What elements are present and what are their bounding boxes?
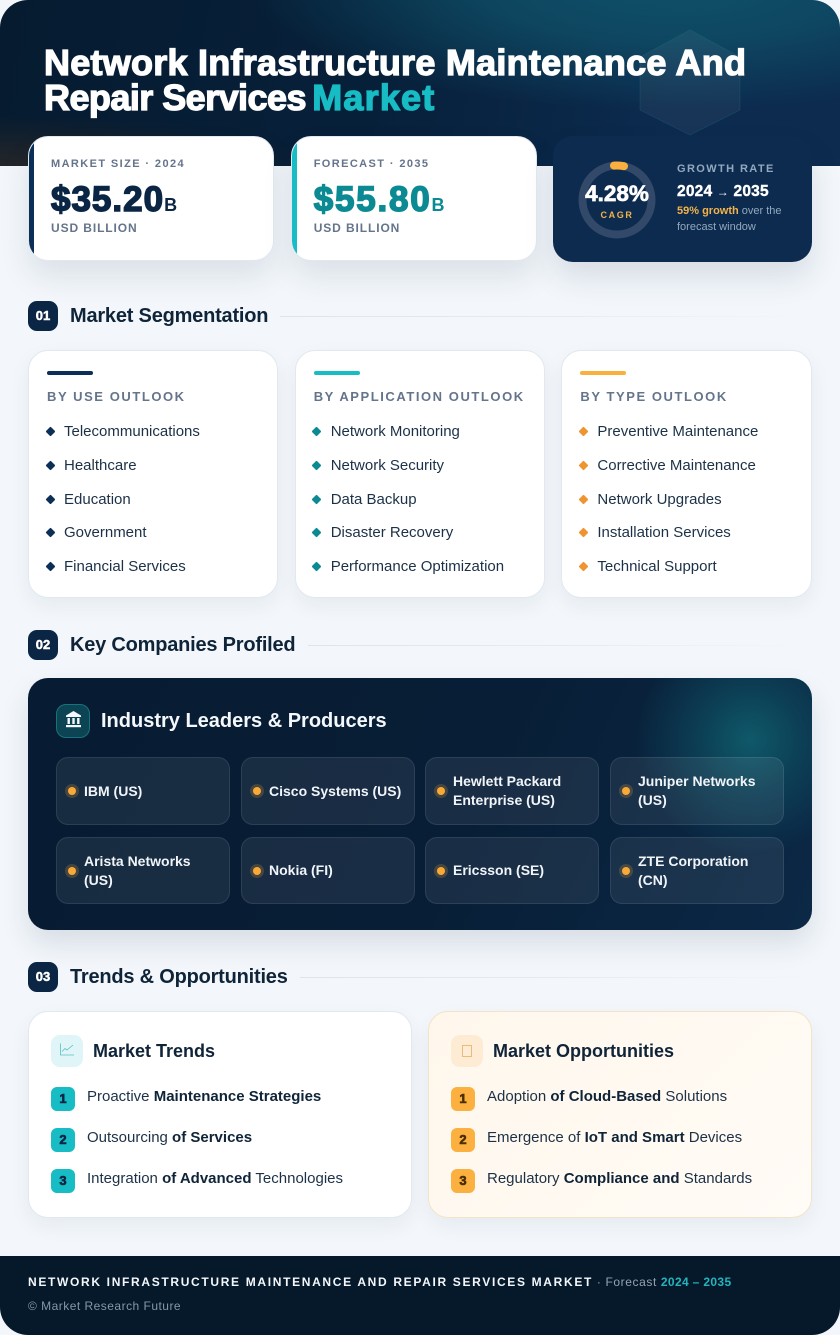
panel: market trends: 3 [59, 1173, 67, 1188]
panel: market opportunities [428, 1011, 812, 1218]
panel: market opportunities: 2 [459, 1132, 467, 1147]
panel: industry leaders: Cisco Systems (US) [269, 782, 401, 798]
icon: bank [56, 704, 90, 738]
stat card: forecast: $55.80B [314, 180, 445, 219]
panel: industry leaders: Arista Networks [84, 852, 191, 868]
heading: key companies: Key Companies Profiled [70, 634, 295, 656]
stat card: market size: USD BILLION [51, 221, 138, 235]
footer copyright: © Market Research Future [28, 1299, 181, 1313]
footer [0, 1256, 840, 1335]
panel: by type outlook: Technical Support [597, 558, 717, 575]
panel: industry leaders: Juniper Networks [638, 773, 755, 789]
panel: industry leaders [28, 678, 812, 930]
panel: market opportunities: Adoption of Cloud-Based Solutions [487, 1088, 727, 1105]
panel: by application outlook: BY APPLICATION OUTLOOK [314, 389, 525, 404]
stat card: market size [28, 136, 274, 261]
panel: market trends: 1 [59, 1091, 67, 1106]
panel: by type outlook: BY TYPE OUTLOOK [580, 389, 728, 404]
panel: by use outlook: Healthcare [64, 457, 137, 474]
title: Network Infrastructure Maintenance And [44, 42, 746, 82]
panel: by use outlook: Telecommunications [64, 423, 200, 440]
stat card: CAGR growth rate: 2024 → 2035 [677, 183, 769, 200]
panel: market trends: Proactive Maintenance Strategies [87, 1088, 321, 1105]
section number 03 [28, 962, 58, 992]
panel: by use outlook: Financial Services [64, 558, 186, 575]
CAGR ring [578, 162, 656, 238]
panel: industry leaders: ZTE Corporation [638, 852, 748, 868]
panel: industry leaders: (CN) [638, 872, 668, 888]
section number 02: 02 [36, 637, 50, 652]
panel: by use outlook: Education [64, 491, 131, 508]
CAGR value: 4.28% [585, 181, 649, 206]
stat card: CAGR growth rate [553, 136, 812, 262]
panel: market trends: Outsourcing of Services [87, 1129, 252, 1146]
panel: market trends: 2 [59, 1132, 67, 1147]
panel: by application outlook: Performance Optimization [331, 558, 504, 575]
growth text: GROWTH RATE [677, 163, 775, 175]
panel: market opportunities: Market Opportunities [493, 1041, 674, 1061]
panel: by application outlook: Data Backup [331, 491, 417, 508]
panel: by type outlook: Preventive Maintenance [597, 423, 758, 440]
panel: by type outlook: Corrective Maintenance [597, 457, 756, 474]
icon: placeholder glyph [451, 1035, 483, 1067]
icon: line chart [51, 1035, 83, 1067]
stat card: forecast: USD BILLION [314, 221, 400, 235]
panel: industry leaders: (US) [638, 792, 667, 808]
panel: market opportunities: 3 [459, 1173, 467, 1188]
panel: by application outlook [295, 350, 545, 598]
panel: market opportunities: 1 [459, 1091, 467, 1106]
panel: market opportunities: Emergence of IoT and Smart Devices [487, 1129, 742, 1146]
company chips: IBM (US) [84, 782, 142, 798]
footer title: NETWORK INFRASTRUCTURE MAINTENANCE AND REPAIR SERVICES MARKET · Forecast 2024 – 2035 [28, 1275, 731, 1289]
stat card: market size: $35.20B [51, 180, 177, 219]
stat card: forecast: FORECAST · 2035 [314, 158, 429, 170]
panel: by type outlook: Installation Services [597, 524, 731, 541]
panel: industry leaders: Nokia (FI) [269, 862, 333, 878]
panel: industry leaders: Enterprise (US) [453, 792, 555, 808]
title [44, 42, 746, 118]
section number 03: 03 [36, 969, 50, 984]
panel: by use outlook: Government [64, 524, 147, 541]
heading: trends and opportunities: Trends & Opportunities [70, 966, 288, 988]
stat card: market size: MARKET SIZE · 2024 [51, 158, 185, 170]
company chips [56, 757, 230, 825]
panel: market trends [28, 1011, 412, 1218]
panel: by application outlook: Network Monitoring [331, 423, 460, 440]
panel: market trends: Market Trends [93, 1041, 215, 1061]
panel: by application outlook: Network Security [331, 457, 444, 474]
header banner [0, 0, 840, 166]
panel: by application outlook: Disaster Recovery [331, 524, 453, 541]
decorative hexagon [640, 30, 740, 136]
panel: by use outlook: BY USE OUTLOOK [47, 389, 186, 404]
panel: by type outlook [561, 350, 812, 598]
panel: market trends: Integration of Advanced Technologies [87, 1170, 343, 1187]
CAGR label: CAGR [601, 210, 633, 220]
panel heading: Industry Leaders & Producers [101, 710, 387, 732]
section number 02 [28, 630, 58, 660]
section number 01: 01 [36, 308, 50, 323]
stat card: CAGR growth rate: 59% growth over the [677, 205, 782, 217]
title: Repair Services Market [44, 76, 435, 118]
panel: industry leaders: (US) [84, 872, 113, 888]
heading: market segmentation: Market Segmentation [70, 305, 268, 327]
panel: by type outlook: Network Upgrades [597, 491, 722, 508]
panel: industry leaders: Hewlett Packard [453, 773, 561, 789]
panel: industry leaders: Ericsson (SE) [453, 862, 544, 878]
stat card: forecast [291, 136, 537, 261]
section number 01 [28, 301, 58, 331]
stat card: CAGR growth rate: forecast window [677, 221, 756, 233]
panel: market opportunities: Regulatory Compliance and Standards [487, 1170, 752, 1187]
panel: by use outlook [28, 350, 278, 598]
